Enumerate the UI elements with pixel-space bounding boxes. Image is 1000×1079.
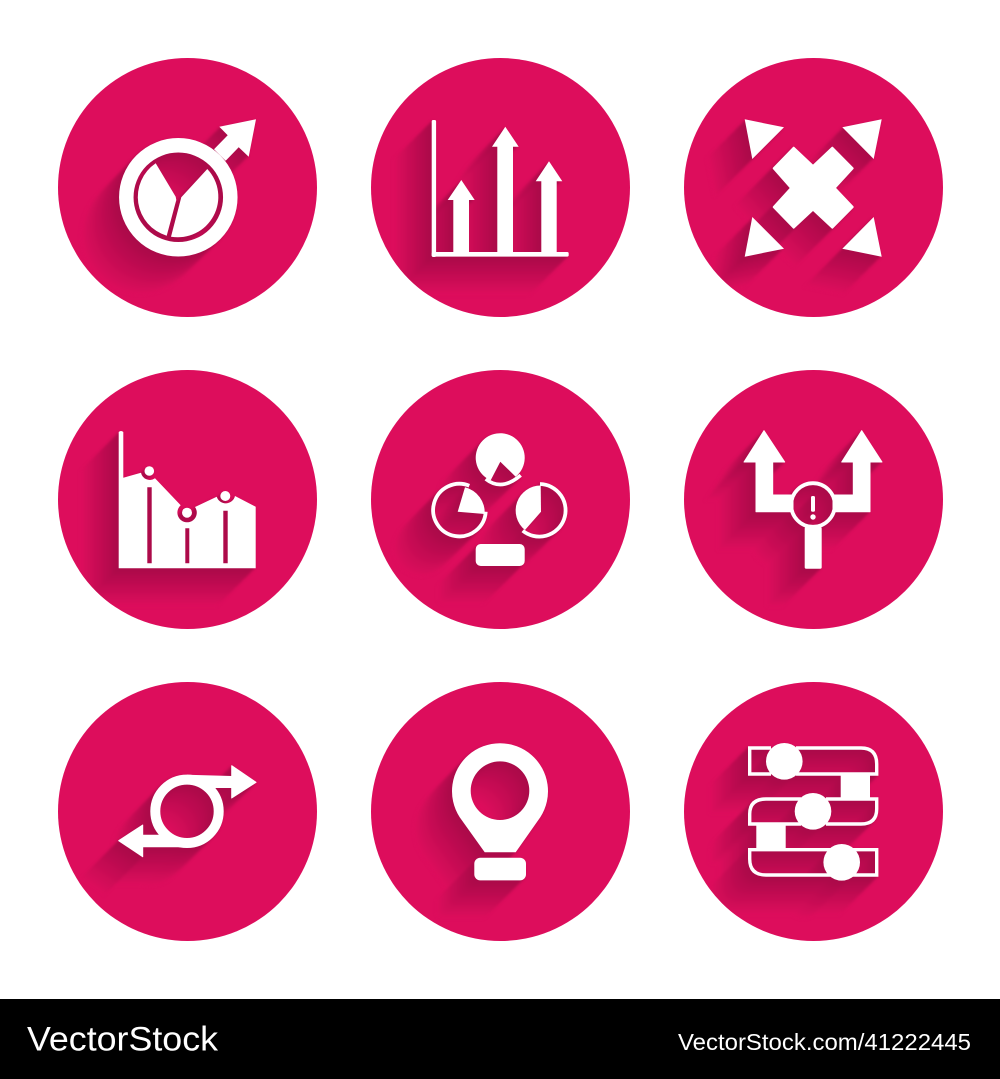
icon: chart axes with three up arrows xyxy=(432,120,569,257)
badge circle xyxy=(58,58,317,317)
badge circle xyxy=(684,58,943,317)
icon: ring with arrow and pie slices xyxy=(126,119,256,249)
footer image id text: VectorStock.com/41222445 xyxy=(678,1029,971,1055)
icon: map pin with label bar xyxy=(452,743,548,880)
panel: loop arrows badge xyxy=(58,682,317,941)
badge circle xyxy=(58,370,317,629)
badge circle xyxy=(684,682,943,941)
panel: area chart badge xyxy=(58,370,317,629)
panel: fork arrows with warning badge xyxy=(684,370,943,629)
panel: expand arrows badge xyxy=(684,58,943,317)
badge circle xyxy=(58,682,317,941)
icon: area chart with data points xyxy=(119,431,256,568)
footer brand text: VectorStock xyxy=(27,1020,219,1058)
badge circle xyxy=(684,370,943,629)
badge circle xyxy=(371,682,630,941)
icon: circle with opposing arrows xyxy=(119,766,256,857)
panel: location pin badge xyxy=(371,682,630,941)
panel: three pie charts badge xyxy=(371,370,630,629)
icon: three pie charts and label bar xyxy=(433,433,566,566)
icon: cross with four corner triangles xyxy=(745,119,882,257)
footer bar xyxy=(0,999,1000,1079)
panel: pie chart male symbol badge xyxy=(58,58,317,317)
badge circle xyxy=(371,58,630,317)
panel: rising bar arrows badge xyxy=(371,58,630,317)
icon: connected sliders with knobs xyxy=(750,743,877,881)
badge circle xyxy=(371,370,630,629)
panel: sliders badge xyxy=(684,682,943,941)
icon: split road arrows with exclamation circle xyxy=(744,431,882,569)
